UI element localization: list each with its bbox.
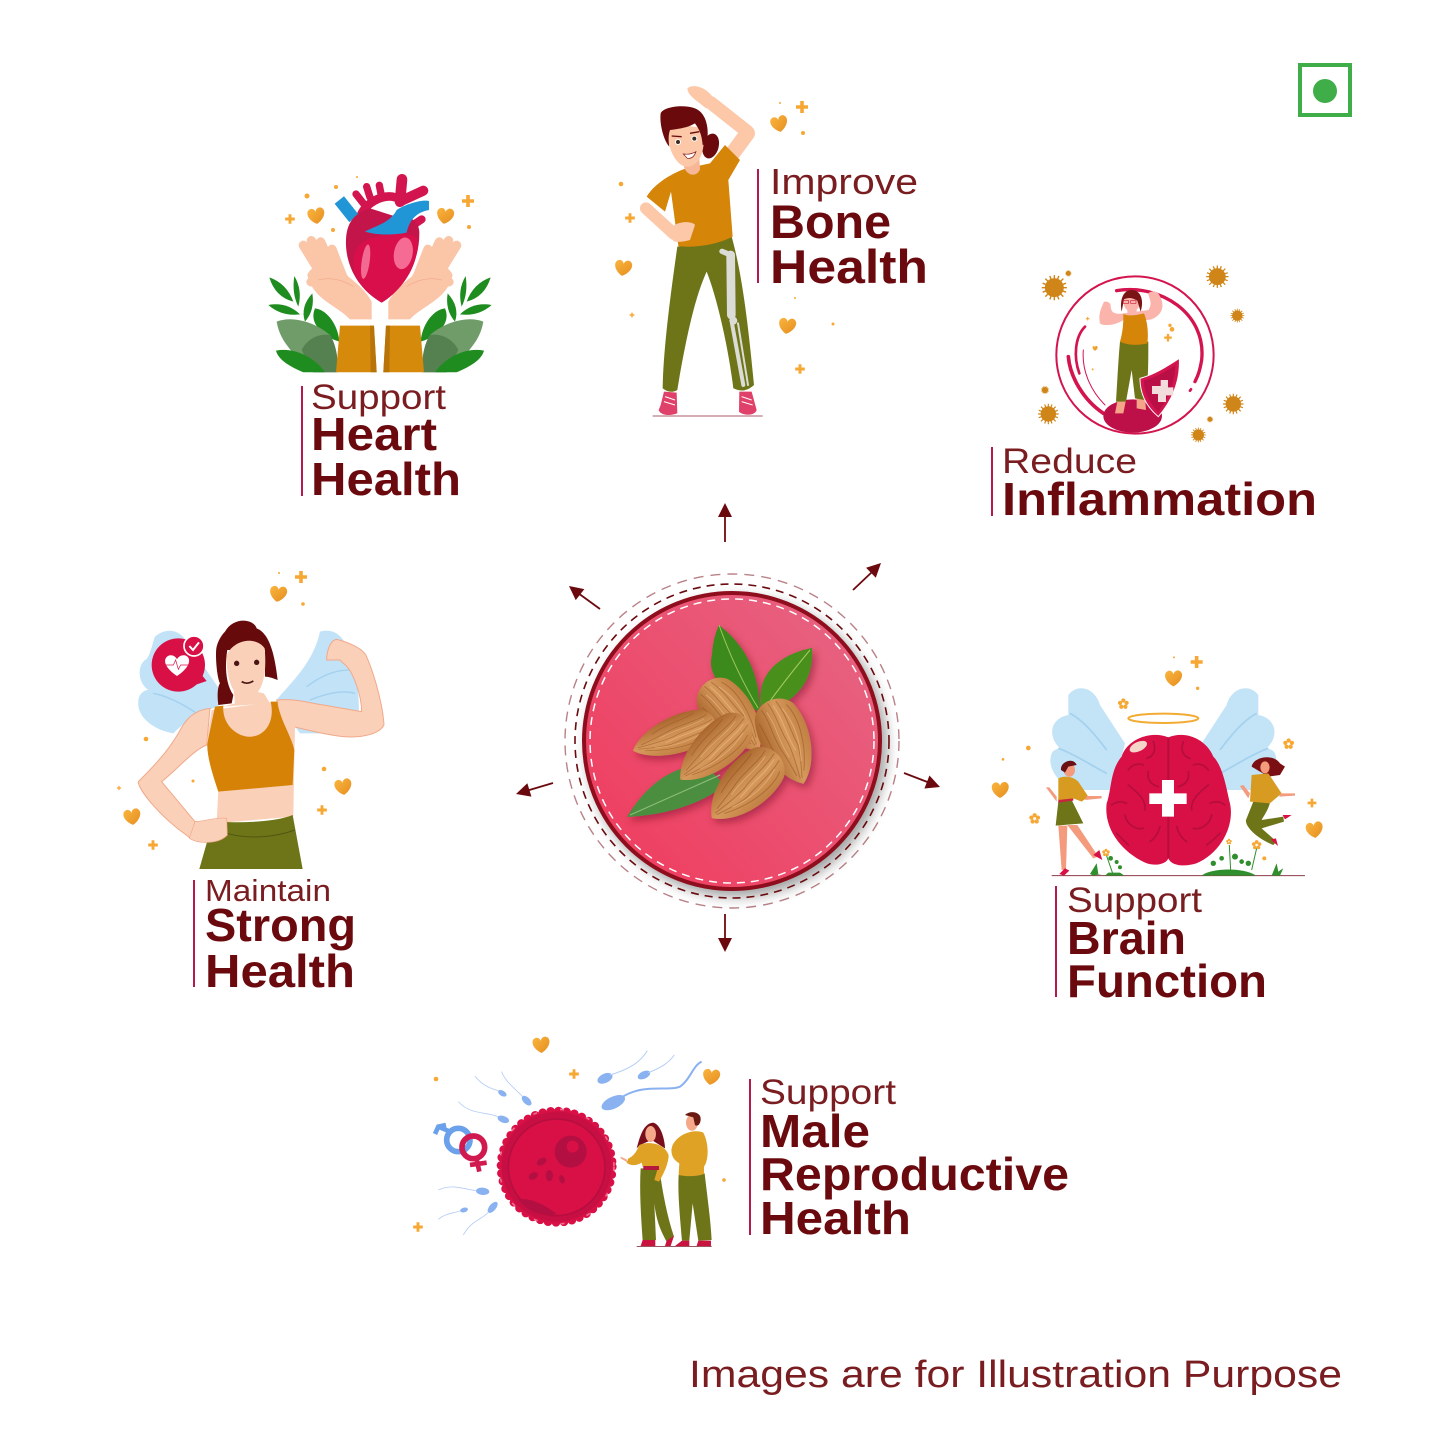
illustration: woman flexing with wings <box>138 621 384 869</box>
label: maintain strong health: Strong <box>205 899 356 951</box>
figure: woman jumping on right <box>1240 757 1295 846</box>
label: support male reproductive health: Health <box>760 1192 911 1244</box>
plants and flowers <box>1090 845 1283 876</box>
arrow: upper right to inflammation <box>853 558 886 590</box>
label: support heart health <box>302 378 461 505</box>
egg cell <box>499 1109 614 1224</box>
decoration: hearts and sparkles <box>285 176 474 232</box>
couple <box>621 1112 712 1247</box>
panel: support brain function <box>992 656 1324 1007</box>
label: reduce inflammation <box>992 442 1317 525</box>
icon: vegetarian mark <box>1300 65 1350 115</box>
illustration: stretching woman with bone <box>646 86 763 416</box>
label: maintain strong health: Health <box>205 945 355 997</box>
label: improve bone health: Bone <box>770 195 891 248</box>
panel: support male reproductive health <box>413 1036 1069 1247</box>
label: support heart health: Health <box>311 453 461 505</box>
panel: maintain strong health <box>117 571 384 997</box>
panel: reduce inflammation <box>992 265 1317 525</box>
label: reduce inflammation: Inflammation <box>1002 473 1317 525</box>
label: support male reproductive health: Male <box>760 1105 870 1157</box>
label: support brain function: Function <box>1067 955 1267 1007</box>
decoration: hearts and sparkles <box>413 1036 726 1232</box>
label: support male reproductive health: Reproductive <box>760 1148 1069 1200</box>
label: support brain function: Support <box>1067 881 1202 920</box>
label: maintain strong health <box>194 873 356 997</box>
label: support heart health: Support <box>311 378 446 417</box>
label: reduce inflammation: Reduce <box>1002 442 1137 481</box>
illustration: egg, sperm and couple <box>435 1051 712 1247</box>
label: support brain function <box>1056 881 1267 1007</box>
illustration: woman with shield in ring <box>1038 265 1244 442</box>
illustration: heart in hands <box>268 179 492 372</box>
label: support male reproductive health <box>750 1073 1069 1244</box>
illustration: winged brain with figures <box>992 656 1324 876</box>
label: improve bone health <box>758 161 928 293</box>
arrow: upper left to heart health <box>565 580 600 609</box>
panel: improve bone health <box>614 86 928 416</box>
footer note: Images are for Illustration Purpose <box>689 1354 1342 1396</box>
decoration: hearts and sparkles <box>117 571 353 850</box>
label: support brain function: Brain <box>1067 912 1186 964</box>
panel: support heart health <box>268 176 492 505</box>
sperm cells <box>438 1051 702 1235</box>
figure: woman on left <box>1046 761 1102 876</box>
arrow: right to brain function <box>904 773 943 794</box>
label: support male reproductive health: Support <box>760 1073 896 1112</box>
panel: central almond badge <box>565 574 899 908</box>
label: improve bone health: Health <box>770 240 928 293</box>
image: almonds with leaves <box>626 625 826 836</box>
label: maintain strong health: Maintain <box>205 873 331 908</box>
gender symbols <box>435 1125 487 1172</box>
label: improve bone health: Improve <box>770 161 918 202</box>
arrow: down to reproductive health <box>718 914 732 952</box>
arrow: up to bone health <box>718 503 732 542</box>
decoration: hearts and sparkles <box>614 101 834 374</box>
label: support heart health: Heart <box>311 408 437 460</box>
arrow: left to strong health <box>514 783 553 801</box>
